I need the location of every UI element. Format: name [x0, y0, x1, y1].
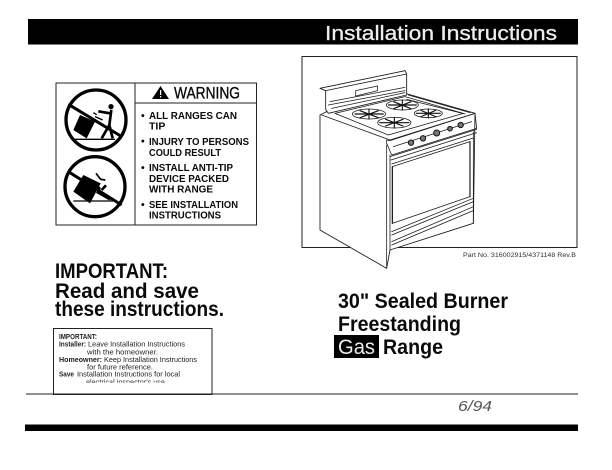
product title: Range	[383, 336, 443, 359]
header bar	[28, 19, 578, 45]
warning bullet list: WITH RANGE	[149, 184, 213, 196]
oven door	[392, 142, 470, 223]
icon: range tipping with person standing on door	[66, 90, 126, 150]
product title: 30" Sealed Burner	[338, 290, 508, 313]
header title: Installation Instructions	[325, 22, 557, 45]
warning bullet list: •	[141, 199, 145, 211]
warning bullet list	[141, 110, 249, 222]
burners	[352, 100, 442, 128]
important heading: IMPORTANT:	[55, 260, 168, 283]
warning bullet list: DEVICE PACKED	[149, 173, 229, 185]
warning bullet list: •	[141, 162, 145, 174]
notice text: Save	[59, 370, 74, 378]
warning bullet list: ALL RANGES CAN	[149, 110, 237, 122]
gas highlight: Gas	[338, 336, 375, 359]
display panel	[356, 86, 378, 96]
notice text: with the homeowner.	[86, 348, 158, 356]
product title: Freestanding	[338, 313, 461, 336]
oven door handle	[390, 129, 477, 164]
warning bullet list: INSTRUCTIONS	[149, 210, 221, 222]
warning heading	[152, 84, 240, 102]
warning bullet list: INSTALL ANTI-TIP	[149, 162, 233, 174]
product title	[334, 290, 508, 359]
important heading: these instructions.	[55, 298, 224, 321]
illustration: gas range	[320, 71, 477, 268]
warning bullet list: COULD RESULT	[149, 147, 222, 159]
warning bullet list: •	[141, 136, 145, 148]
part number: Part No. 316002915/4371148 Rev.B	[463, 252, 577, 259]
panel: warning label	[56, 83, 256, 225]
icon: range tipped over person	[65, 157, 125, 217]
notice box	[54, 328, 212, 394]
divider rule	[26, 394, 578, 395]
notice text: for future reference.	[87, 362, 153, 372]
warning bullet list: •	[141, 110, 145, 122]
handwritten date: 6/94	[458, 398, 492, 415]
knobs	[408, 122, 463, 145]
warning bullet list: INJURY TO PERSONS	[149, 136, 249, 148]
notice text: Installer:	[59, 340, 86, 348]
warning heading: WARNING	[174, 84, 240, 102]
lower trim	[392, 198, 473, 245]
notice text: electrical inspector's use.	[86, 378, 167, 386]
footer bar	[25, 424, 578, 431]
notice text: Leave Installation Instructions	[88, 340, 185, 348]
important heading: Read and save	[55, 280, 199, 303]
important heading	[55, 260, 224, 321]
notice text: Keep Installation Instructions	[104, 355, 197, 364]
panel: range illustration frame	[302, 56, 577, 248]
notice text: IMPORTANT:	[59, 332, 97, 341]
warning bullet list: TIP	[149, 120, 165, 132]
notice text: Installation Instructions for local	[77, 370, 180, 378]
notice text: Homeowner:	[59, 355, 102, 364]
icon: warning triangle	[152, 86, 169, 99]
warning bullet list: SEE INSTALLATION	[149, 199, 238, 211]
control panel	[387, 113, 477, 155]
cooktop	[335, 97, 463, 135]
notice text	[59, 334, 197, 382]
